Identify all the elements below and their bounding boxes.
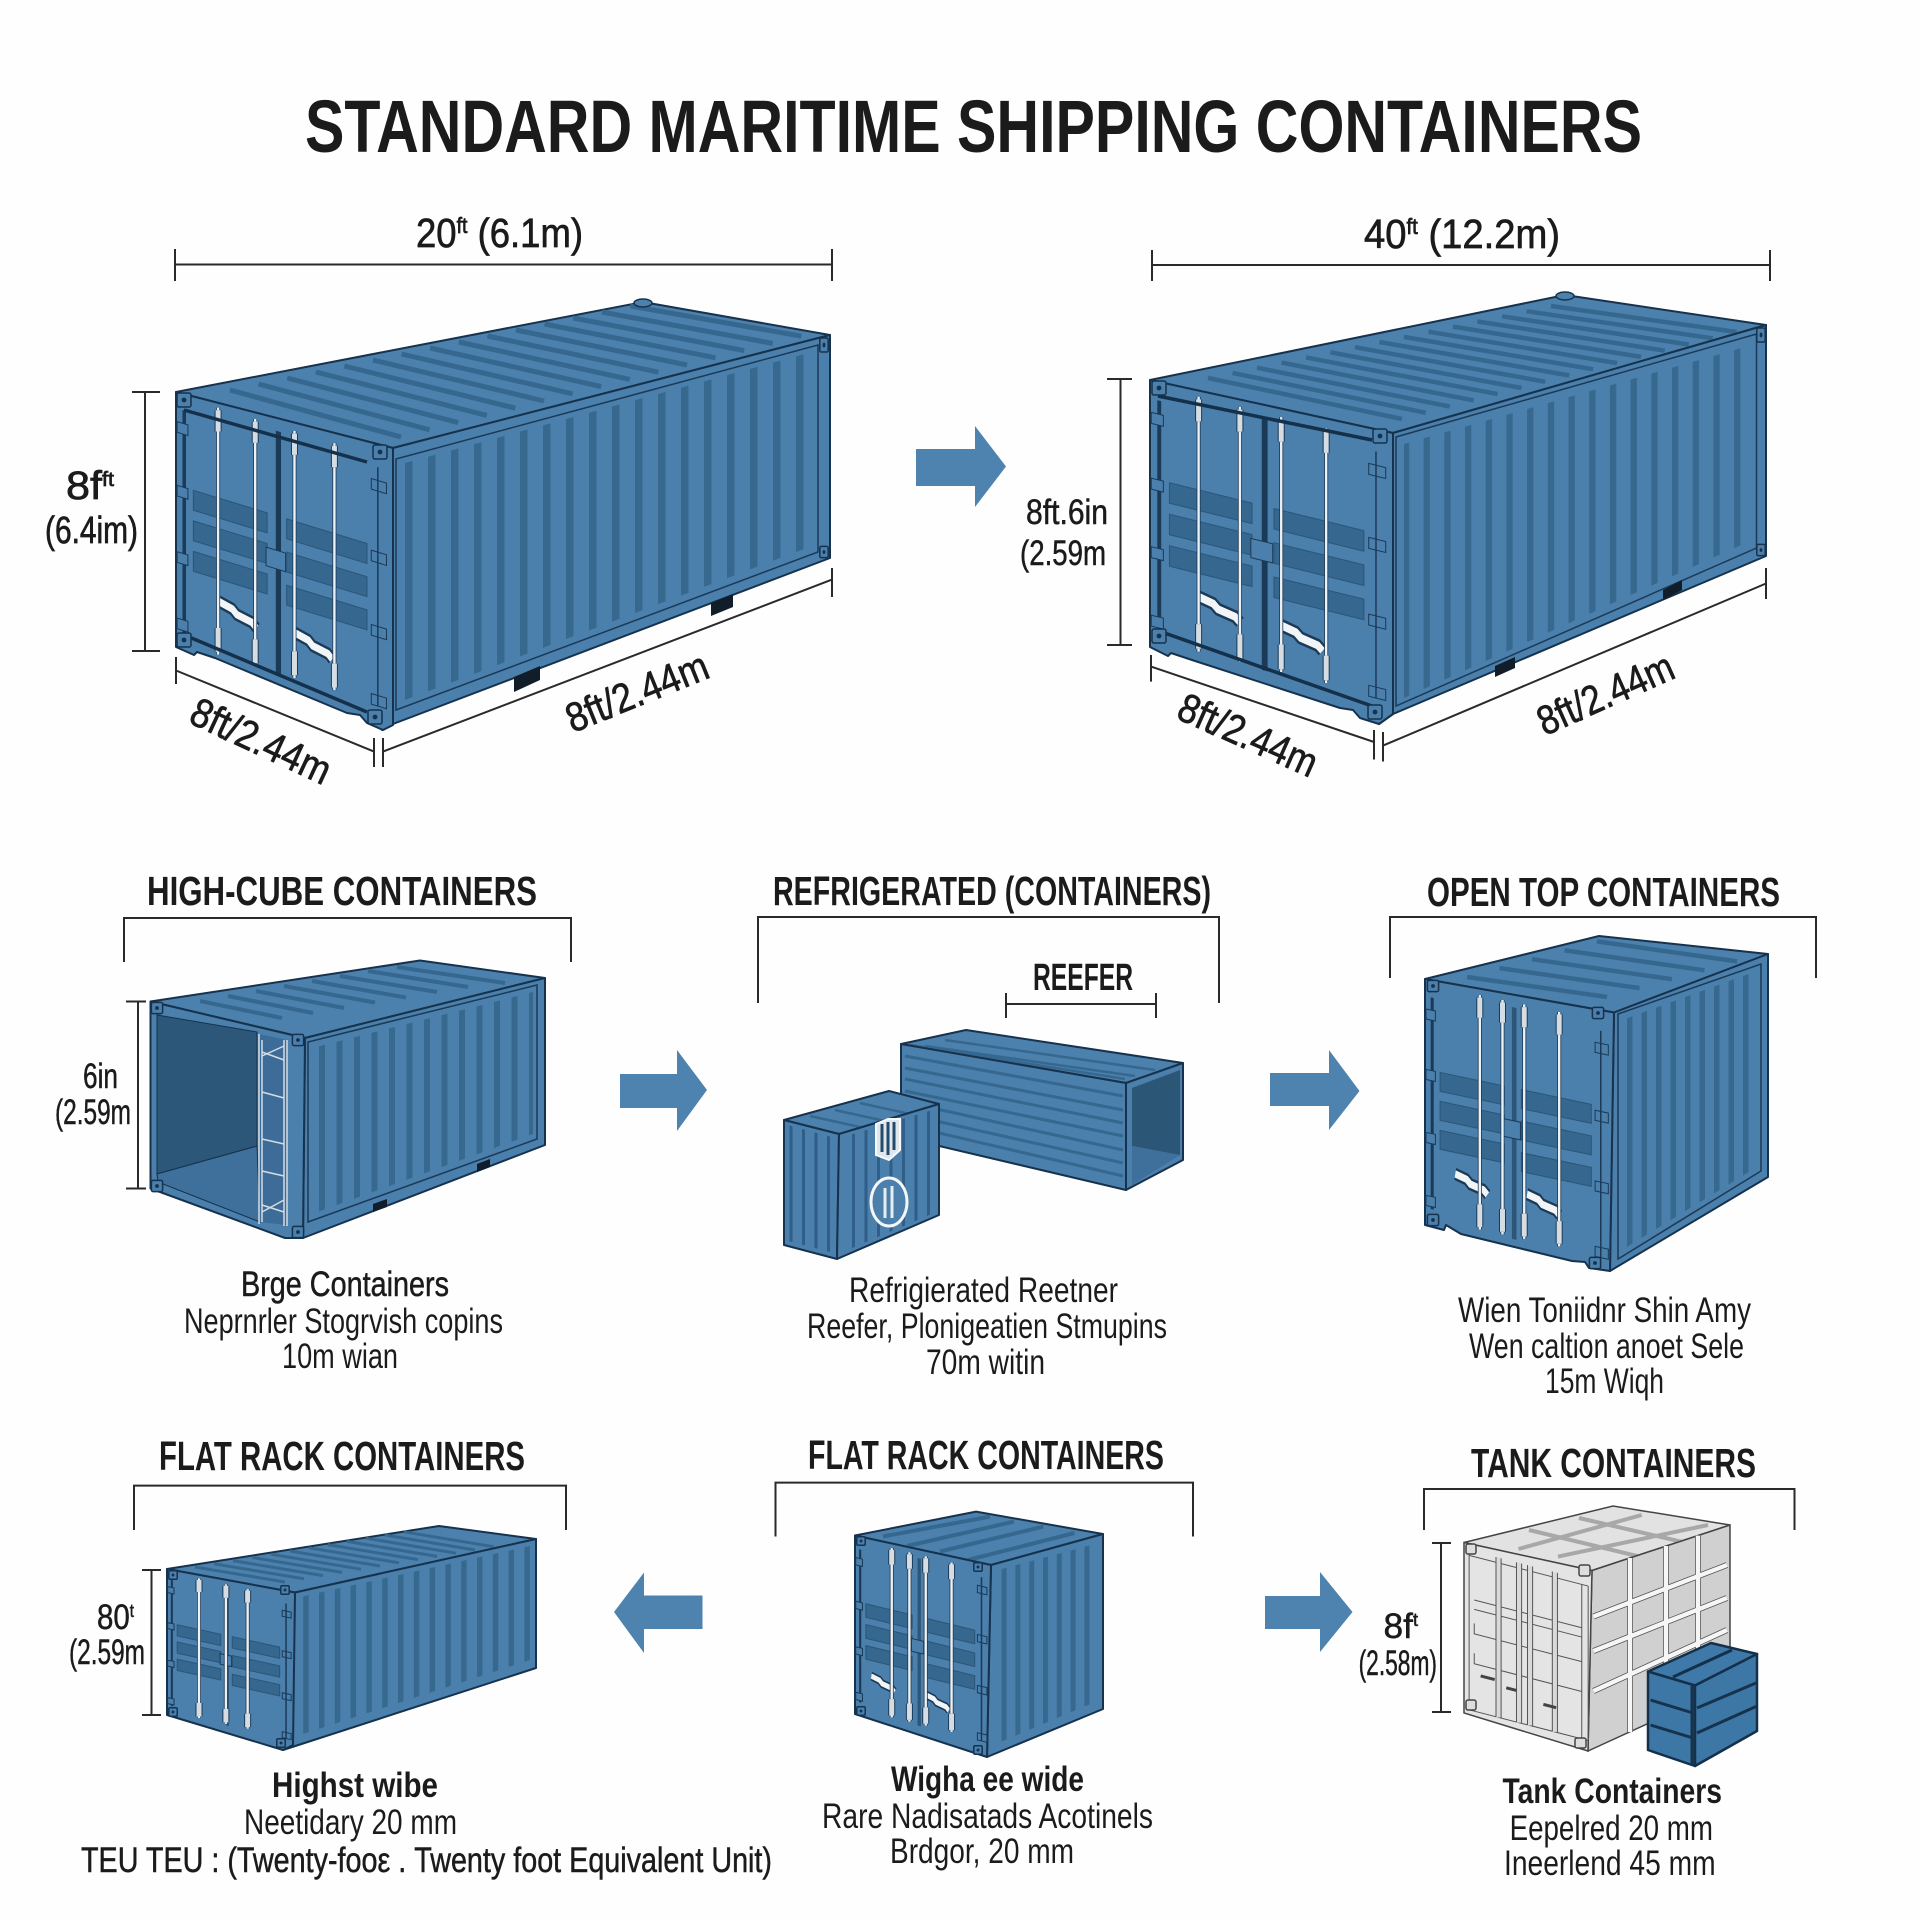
length dimension: [383, 568, 832, 767]
heading: FLAT RACK CONTAINERS: [808, 1432, 1164, 1478]
panel: high-cube containers: [55, 868, 571, 1376]
caption: Tank Containers: [1502, 1772, 1722, 1811]
heading: HIGH-CUBE CONTAINERS: [147, 868, 537, 914]
height label: ft: [102, 469, 114, 491]
panel: tank containers: [1359, 1440, 1794, 1883]
caption: Eepelred 20 mm: [1510, 1809, 1713, 1848]
door end: [855, 1536, 991, 1757]
height label: (2.58m): [1359, 1644, 1437, 1683]
height label: [55, 1057, 131, 1132]
top face: [150, 960, 545, 1038]
caption: [1458, 1291, 1751, 1401]
long reefer container: [901, 1030, 1183, 1190]
heading bracket: [1424, 1489, 1794, 1530]
height label: 8f: [1384, 1607, 1413, 1646]
icon: fan grille: [876, 1119, 900, 1160]
corrugated side wall: [283, 1539, 536, 1750]
height dimension line: [132, 392, 160, 651]
height label: (6.4im): [45, 510, 138, 552]
height label: t: [130, 1601, 134, 1621]
width label: (12.2m): [1418, 211, 1560, 257]
height label: [69, 1598, 145, 1672]
panel: flat rack containers, left: [69, 1433, 566, 1842]
height dimension line: [1107, 379, 1132, 645]
caption: Brge Containers: [241, 1265, 449, 1304]
heading bracket: [758, 917, 1219, 1003]
height label: 8ft.6in: [1026, 493, 1108, 532]
height label: 6in: [83, 1057, 118, 1096]
panel: 20ft container: [45, 210, 832, 794]
corrugated side wall: [382, 335, 830, 730]
grid side wall: [1588, 1525, 1730, 1751]
arrow: refrigerated to open top: [1270, 1050, 1360, 1130]
depth dimension: [1151, 655, 1374, 760]
height label: [45, 464, 138, 552]
width dimension line: [175, 249, 832, 281]
TEU definition: TEU TEU : (Twenty-fooε . Twenty foot Equivalent Unit): [81, 1841, 772, 1880]
door end: [167, 1569, 295, 1750]
caption: 70m witin: [926, 1343, 1045, 1382]
arrow: high-cube to refrigerated: [620, 1050, 707, 1131]
caption: [822, 1760, 1153, 1871]
caption: [244, 1766, 457, 1842]
height label: 8f: [66, 464, 99, 508]
panel: 40ft container: [1020, 211, 1770, 786]
corrugated side wall: [1379, 325, 1766, 724]
height label: t: [1413, 1610, 1418, 1630]
panel: refrigerated containers: [758, 868, 1219, 1382]
heading: TANK CONTAINERS: [1471, 1440, 1756, 1486]
caption: Neetidary 20 mm: [244, 1803, 457, 1842]
grey tank container: [1464, 1506, 1730, 1751]
caption: [807, 1271, 1167, 1382]
height label: (2.59m: [55, 1093, 131, 1132]
caption: 15m Wiqh: [1545, 1362, 1664, 1401]
depth dimension: [176, 657, 374, 767]
heading bracket: [1390, 917, 1816, 978]
heading: FLAT RACK CONTAINERS: [159, 1433, 525, 1479]
reefer dimension line: [1006, 993, 1156, 1018]
height label: (2.59m: [1020, 534, 1106, 573]
length label: 8ft/2.44m: [559, 643, 715, 741]
top face: [1464, 1506, 1730, 1570]
height dimension line: [126, 1002, 146, 1188]
heading: REFRIGERATED (CONTAINERS): [773, 868, 1211, 914]
height label: [1020, 493, 1108, 573]
length dimension: [1383, 568, 1766, 762]
caption: Rare Nadisatads Acotinels: [822, 1797, 1153, 1836]
reefer label: REEFER: [1033, 957, 1133, 999]
caption: Refrigierated Reetner: [849, 1271, 1118, 1310]
caption: Reefer, Plonigeatien Stmupins: [807, 1307, 1167, 1346]
open door end with interior: [150, 1002, 305, 1238]
corrugated side wall: [303, 978, 545, 1238]
width label: ft: [457, 213, 467, 238]
arrow: 20ft to 40ft: [916, 426, 1006, 507]
icon: round fan: [871, 1178, 907, 1226]
corrugated side wall: [1610, 954, 1768, 1271]
width dimension line: [1152, 250, 1770, 281]
caption: 10m wian: [282, 1337, 398, 1376]
arrow: flat rack centre to left: [614, 1572, 702, 1653]
height dimension line: [142, 1570, 161, 1715]
length label: 8ft/2.44m: [1530, 643, 1681, 744]
panel: open top containers: [1390, 869, 1816, 1401]
short reefer unit: [784, 1091, 939, 1259]
heading: OPEN TOP CONTAINERS: [1427, 869, 1780, 915]
caption: Wien Toniidnr Shin Amy: [1458, 1291, 1751, 1330]
top face: [855, 1512, 1103, 1565]
caption: Highst wibe: [272, 1766, 438, 1805]
caption: Neprnrler Stogrvish copins: [184, 1302, 503, 1341]
heading bracket: [134, 1486, 566, 1530]
width label: 20: [416, 210, 462, 256]
corrugated side wall: [987, 1534, 1103, 1757]
top face: [176, 299, 830, 448]
height label: [1359, 1607, 1437, 1683]
caption: Wen caltion anoet Sele: [1469, 1327, 1744, 1366]
small blue tank unit: [1648, 1643, 1757, 1766]
depth label: 8ft/2.44m: [1171, 684, 1325, 786]
door end: [1425, 979, 1614, 1271]
caption: Brdgor, 20 mm: [890, 1832, 1074, 1871]
door end: [176, 392, 393, 730]
height dimension line: [1432, 1543, 1451, 1712]
arrow: flat rack centre to tank: [1265, 1572, 1352, 1652]
width label: ft: [1406, 214, 1418, 239]
top face: [1425, 936, 1768, 1012]
top face: [1150, 292, 1766, 433]
door end: [1464, 1542, 1592, 1751]
caption: Wigha ee wide: [891, 1760, 1084, 1799]
height label: 80: [97, 1598, 136, 1637]
panel: flat rack containers, centre: [776, 1432, 1193, 1871]
heading bracket: [124, 918, 571, 962]
heading bracket: [776, 1483, 1193, 1536]
folded door ladder: [259, 1034, 287, 1226]
caption: [1502, 1772, 1722, 1883]
caption: Ineerlend 45 mm: [1504, 1844, 1716, 1883]
depth label: 8ft/2.44m: [183, 688, 339, 794]
height label: (2.59m: [69, 1633, 145, 1672]
width label: 40: [1364, 211, 1410, 257]
door end: [1150, 380, 1393, 724]
top face: [167, 1526, 536, 1592]
width label: (6.1m): [467, 210, 583, 256]
caption: [184, 1265, 503, 1376]
